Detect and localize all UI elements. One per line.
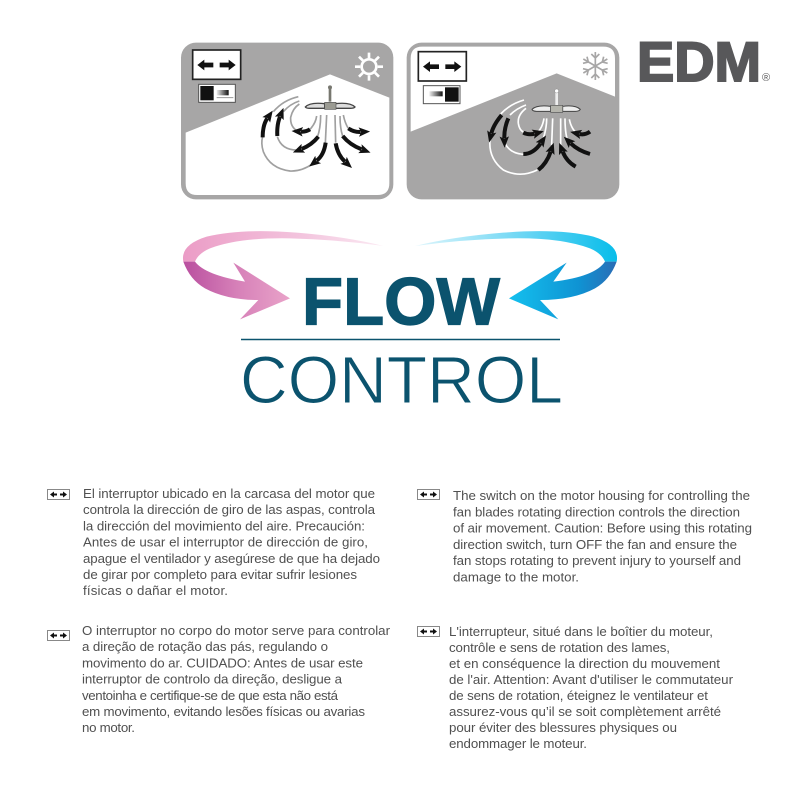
airflow arrows: downward blowing	[262, 97, 362, 171]
paragraph: French	[449, 624, 734, 751]
icon: switch position left	[199, 84, 235, 102]
paragraph: English: of air movement. Caution: Before using this rotating	[453, 521, 752, 536]
paragraph: Spanish: El interruptor ubicado en la carcasa del motor que	[83, 486, 375, 501]
heading: CONTROL: CONTROL	[240, 343, 563, 418]
icon: direction switch	[418, 52, 466, 81]
arrow: blue swoosh	[415, 231, 617, 319]
paragraph: French: pour éviter des blessures physiques ou	[449, 720, 677, 735]
EDM logo: EDM	[637, 30, 761, 93]
EDM logo: ®	[762, 72, 770, 84]
paragraph: French: contrôle e sens de rotation des lames,	[449, 640, 670, 655]
icon: ceiling fan	[305, 85, 355, 109]
icon: switch arrows	[48, 490, 70, 500]
paragraph: English: The switch on the motor housing for controlling the	[453, 488, 750, 503]
sky area	[411, 47, 615, 132]
paragraph: French: assurez-vous qu’il se soit complètement arrêté	[449, 704, 721, 719]
flow control logo	[183, 231, 617, 418]
icon: switch arrows	[48, 630, 70, 640]
paragraph: Spanish: controla la dirección de giro de las aspas, controla	[83, 502, 376, 517]
paragraph: Spanish: Antes de usar el interruptor de dirección de giro,	[83, 535, 368, 550]
paragraph: English: direction switch, turn OFF the fan and ensure the	[453, 537, 737, 552]
paragraph: English	[453, 488, 752, 584]
room interior	[186, 74, 389, 195]
paragraph: Spanish: de girar por completo para evitar sufrir lesiones	[83, 567, 357, 582]
icon: ceiling fan	[532, 89, 580, 112]
paragraph: Portuguese: a direção de rotação das pás, regulando o	[82, 639, 328, 654]
panel: winter mode fan diagram	[407, 43, 619, 199]
text block: Portuguese	[48, 623, 391, 735]
text block: French	[418, 624, 734, 751]
airflow arrows: upward pulling	[490, 100, 590, 174]
paragraph: Spanish: físicas o dañar el motor.	[83, 583, 228, 598]
paragraph: Portuguese: movimento do ar. CUIDADO: Antes de usar este	[82, 655, 363, 670]
icon: switch arrows	[418, 626, 440, 636]
icon: sun	[355, 53, 383, 81]
paragraph: French: L'interrupteur, situé dans le boîtier du moteur,	[449, 624, 713, 639]
icon: direction switch	[193, 50, 241, 79]
paragraph: English: damage to the motor.	[453, 570, 579, 584]
paragraph: Spanish: la dirección del movimiento del aire. Precaución:	[83, 518, 365, 533]
paragraph: Portuguese: O interruptor no corpo do motor serve para controlar	[82, 623, 391, 638]
paragraph: Spanish	[83, 486, 380, 598]
paragraph: French: de sens de rotation, éteignez le ventilateur et	[449, 688, 708, 703]
paragraph: Spanish: apague el ventilador y asegúrese de que ha dejado	[83, 551, 380, 566]
heading: FLOW: FLOW	[302, 264, 501, 340]
icon: switch position right	[423, 86, 460, 104]
paragraph: English: fan blades rotating direction controls the direction	[453, 504, 740, 519]
text block: Spanish	[48, 486, 380, 598]
paragraph: Portuguese	[82, 623, 391, 735]
text block: English	[418, 488, 752, 584]
paragraph: Portuguese: no motor.	[82, 720, 135, 735]
paragraph: French: de l'air. Attention: Avant d'utiliser le commutateur	[449, 672, 734, 687]
arrow: pink swoosh	[183, 231, 383, 319]
icon: snowflake	[583, 52, 608, 80]
paragraph: French: et en conséquence la direction du mouvement	[449, 656, 720, 671]
paragraph: Portuguese: ventoinha e certifique-se de que esta não está	[82, 688, 339, 703]
paragraph: French: endommager le moteur.	[449, 736, 587, 751]
panel: summer mode fan diagram	[181, 43, 393, 199]
paragraph: English: fan stops rotating to prevent injury to yourself and	[453, 553, 741, 568]
icon: switch arrows	[418, 490, 440, 500]
paragraph: Portuguese: interruptor de controlo da direção, desligue a	[82, 672, 343, 687]
paragraph: Portuguese: em movimento, evitando lesões físicas ou avarias	[82, 704, 365, 719]
